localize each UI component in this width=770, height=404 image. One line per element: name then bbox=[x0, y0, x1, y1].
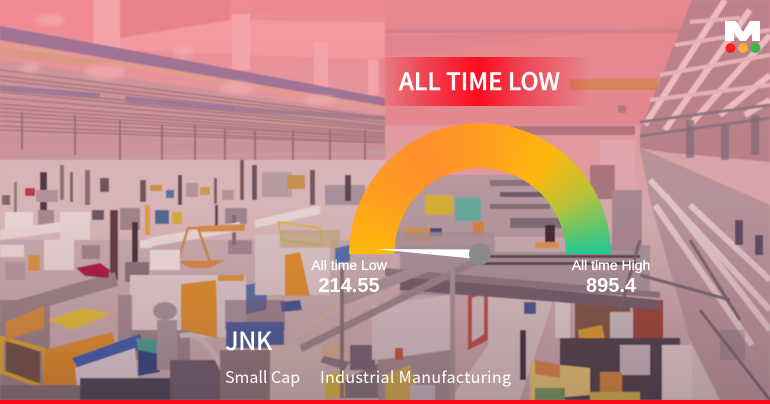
heading: all time low: ALL TIME LOW bbox=[399, 62, 560, 97]
robot arms and gantries bbox=[0, 222, 60, 240]
ticker name: JNK bbox=[225, 322, 272, 358]
rails bbox=[0, 70, 385, 160]
banner: all time low bbox=[375, 57, 590, 106]
low caption: All time Low bbox=[311, 257, 387, 273]
ceiling right side bbox=[385, 0, 695, 125]
market cap tag: Small Cap bbox=[225, 364, 300, 388]
white machine + orange panels bbox=[130, 275, 245, 337]
floor centre-left foreground bbox=[225, 300, 285, 330]
bottom red bar bbox=[0, 400, 770, 404]
far wall right bbox=[600, 140, 635, 190]
dense machinery detail bbox=[0, 165, 365, 282]
high number: 895.4 bbox=[586, 275, 636, 297]
right pipe structures bbox=[620, 0, 770, 400]
sector tag: Industrial Manufacturing bbox=[320, 364, 511, 388]
floor bbox=[450, 295, 555, 400]
upper rail band bbox=[0, 60, 385, 160]
label: all time low value bbox=[311, 257, 387, 297]
machines inside gauge arch bbox=[395, 175, 565, 237]
icon: logo bbox=[725, 21, 760, 53]
gauge arc bbox=[349, 123, 611, 254]
silo bbox=[157, 320, 177, 370]
ceiling left side bbox=[0, 0, 92, 42]
blue beam bbox=[0, 26, 385, 106]
machine hall mid-left bbox=[0, 160, 385, 260]
right foreground machines bbox=[575, 300, 630, 340]
mid-floor gantry bars bbox=[400, 245, 650, 295]
needle hub bbox=[469, 243, 491, 265]
label: all time high value bbox=[572, 257, 650, 297]
gauge needle bbox=[376, 243, 491, 265]
lower-left machines bbox=[0, 300, 50, 400]
low number: 214.55 bbox=[318, 275, 380, 297]
high caption: All time High bbox=[572, 257, 650, 273]
